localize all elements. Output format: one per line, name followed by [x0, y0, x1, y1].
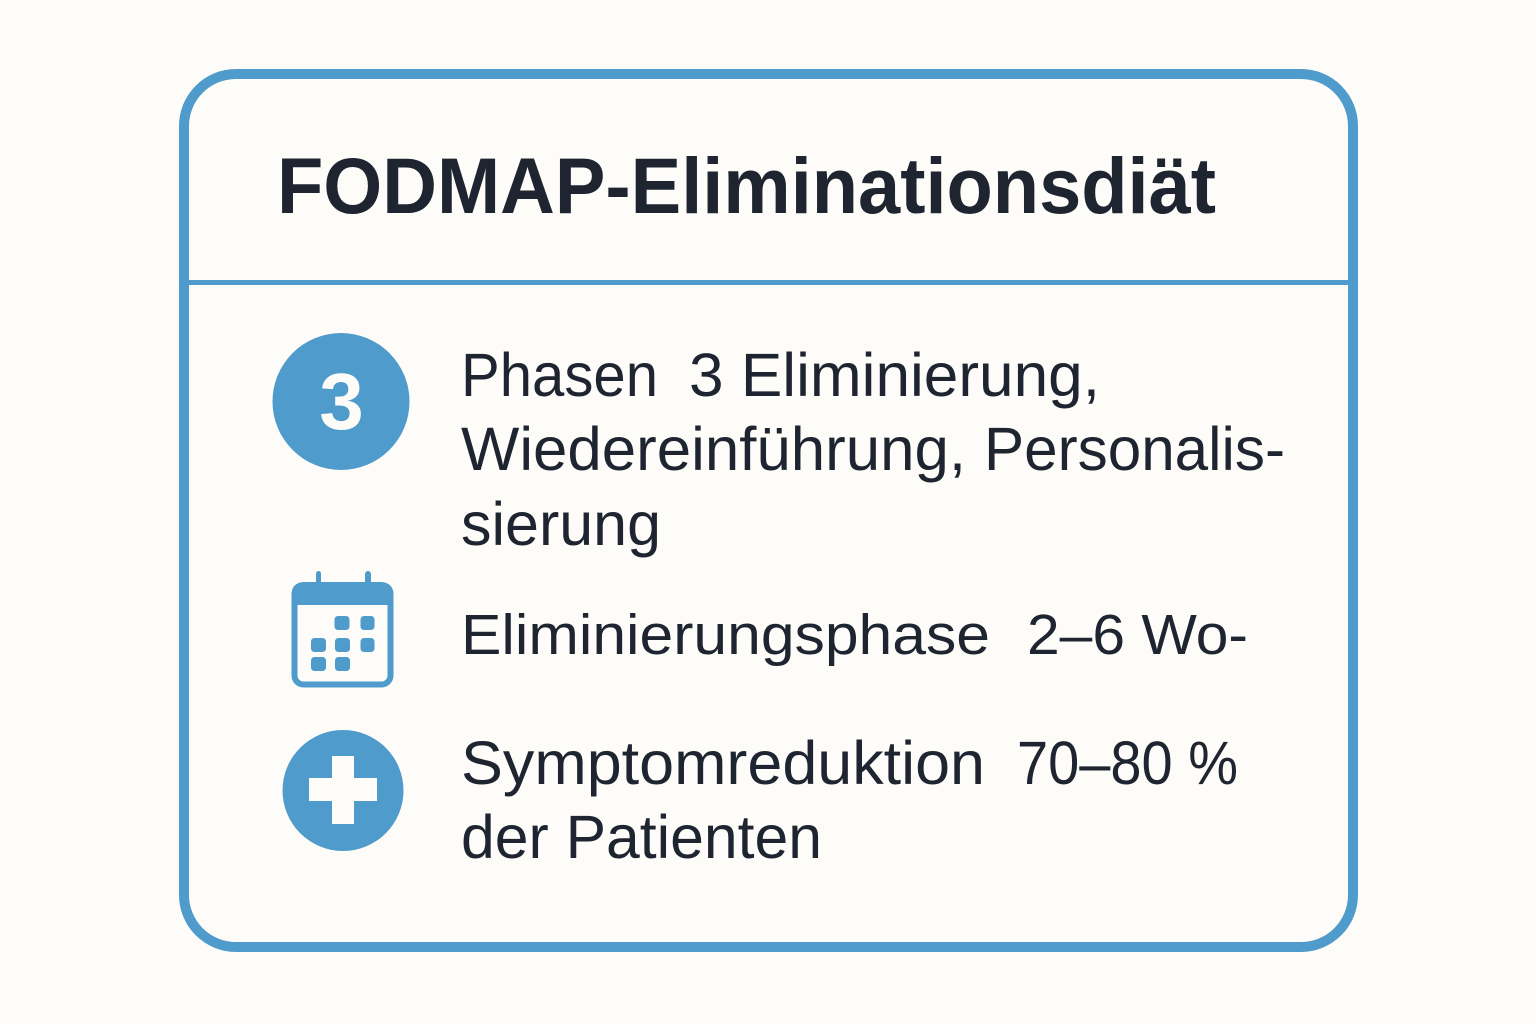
text block: symptom reduction: Symptomreduktion — [461, 729, 985, 797]
text block: phases: Phasen — [461, 341, 658, 409]
text block: phases — [461, 341, 1285, 558]
text block: phases: 3 Eliminierung, — [689, 341, 1100, 409]
title: FODMAP-Eliminationsdiät — [277, 141, 1216, 230]
text block: symptom reduction: der Patienten — [461, 803, 822, 871]
text block: elimination phase: 2–6 Wo- — [1027, 603, 1248, 667]
text block: phases: Wiedereinführung, — [461, 415, 966, 483]
icon: medical cross — [282, 730, 404, 851]
icon: number three badge — [272, 333, 410, 470]
text block: elimination phase: Eliminierungsphase — [461, 603, 990, 667]
icon: number three badge: 3 — [319, 357, 364, 446]
text block: symptom reduction: 70–80 % — [1017, 729, 1238, 797]
icon: calendar — [292, 571, 393, 684]
text block: symptom reduction — [461, 729, 1238, 871]
text block: phases: Personalis- — [984, 415, 1285, 483]
text block: elimination phase — [461, 603, 1248, 667]
text block: phases: sierung — [461, 490, 661, 558]
panel: card frame — [184, 74, 1353, 947]
